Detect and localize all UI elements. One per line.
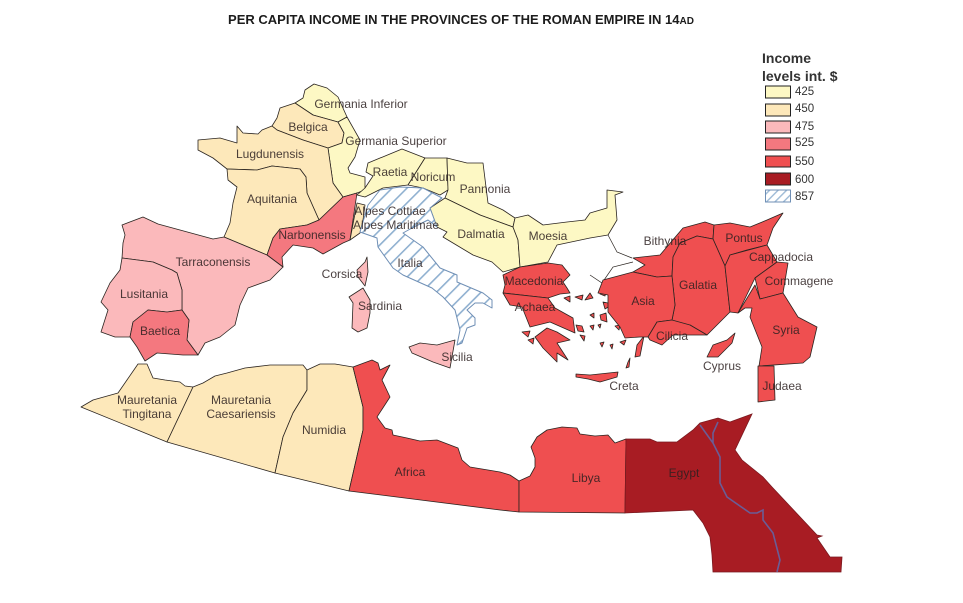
label: Egypt: Egypt — [669, 466, 700, 480]
province: Moesia — [513, 190, 623, 267]
province: Mauretania Tingitana — [81, 364, 193, 442]
legend item 475: 475 — [795, 121, 814, 133]
legend item 525: 525 — [795, 137, 814, 149]
label: Achaea: Achaea — [515, 300, 556, 314]
province: Egypt — [625, 414, 842, 572]
label: Libya: Libya — [572, 471, 601, 485]
province: Alpes — [350, 203, 365, 240]
province: Libya — [519, 427, 626, 513]
label: Mauretania Caesariensis: Mauretania — [211, 393, 271, 407]
label: Asia: Asia — [631, 294, 655, 308]
province: Creta — [576, 372, 618, 382]
label: Africa: Africa — [395, 465, 426, 479]
label: Pontus: Pontus — [725, 231, 763, 245]
label: Cyprus: Cyprus — [703, 359, 741, 373]
label: Macedonia: Macedonia — [505, 274, 564, 288]
province: Numidia — [275, 364, 363, 491]
province: Commagene — [755, 262, 788, 299]
label: Narbonensis: Narbonensis — [278, 228, 346, 242]
label: Italia: Italia — [397, 256, 423, 270]
label: Mauretania Tingitana: Tingitana — [123, 407, 172, 421]
province: Cilicia — [648, 320, 707, 345]
label: Sicilia: Sicilia — [441, 350, 473, 364]
label: Cilicia: Cilicia — [656, 329, 688, 343]
label: Corsica: Corsica — [322, 267, 363, 281]
legend item 450: 450 — [795, 103, 814, 115]
legend title: Income — [762, 50, 811, 66]
province: Cyprus — [707, 333, 735, 357]
legend item 600: 600 — [795, 174, 814, 186]
label: Numidia: Numidia — [302, 423, 346, 437]
label: Sardinia: Sardinia — [358, 299, 402, 313]
province: Belgica — [272, 103, 344, 148]
label: Raetia: Raetia — [373, 165, 408, 179]
label: Moesia: Moesia — [529, 229, 568, 243]
province: Raetia — [357, 149, 425, 197]
Thrace coast outline — [590, 235, 633, 283]
label: Mauretania Tingitana: Mauretania — [117, 393, 177, 407]
label: Syria: Syria — [772, 323, 800, 337]
province: Noricum — [408, 158, 448, 195]
legend item 600 — [766, 173, 814, 186]
legend item 857 — [766, 190, 814, 203]
label: Creta: Creta — [609, 379, 639, 393]
province: Baetica — [130, 310, 198, 361]
title: PER CAPITA INCOME IN THE PROVINCES OF THE ROMAN EMPIRE IN 14AD — [228, 12, 694, 27]
province: Macedonia — [503, 263, 570, 298]
province: Aquitania — [224, 166, 319, 255]
province: Achaea — [503, 293, 575, 333]
province: Bithynia — [633, 222, 714, 277]
province: Cappadocia — [725, 245, 777, 313]
legend item 550: 550 — [795, 156, 814, 168]
province: Germania Superior — [328, 117, 365, 197]
province: Lugdunensis — [198, 126, 343, 220]
legend item 857: 857 — [795, 191, 814, 203]
label: Lugdunensis: Lugdunensis — [236, 147, 304, 161]
legend item 425 — [766, 86, 814, 98]
Peloponnese — [535, 328, 570, 362]
legend item 425: 425 — [795, 86, 814, 98]
label: Galatia: Galatia — [679, 278, 717, 292]
legend item 550 — [766, 156, 814, 168]
province: Germania Inferior — [295, 84, 347, 122]
province: Judaea — [758, 366, 775, 402]
label: Judaea: Judaea — [762, 379, 802, 393]
province: Asia — [598, 272, 675, 338]
province: Pannonia — [445, 158, 515, 227]
province: Syria — [738, 285, 817, 366]
province: Italia — [360, 187, 492, 345]
province: Africa — [349, 360, 519, 512]
legend title: levels int. $ — [762, 68, 838, 84]
label: Germania Superior: Germania Superior — [345, 134, 447, 148]
province: Sicilia — [409, 340, 455, 368]
province labels — [117, 97, 834, 485]
province: Mauretania Caesariensis — [167, 365, 307, 473]
label: Bithynia: Bithynia — [644, 234, 687, 248]
map of Roman provinces — [81, 84, 842, 572]
label: Baetica: Baetica — [140, 324, 180, 338]
label: Tarraconensis: Tarraconensis — [176, 255, 250, 269]
label: Germania Inferior: Germania Inferior — [314, 97, 408, 111]
label: Belgica: Belgica — [288, 120, 328, 134]
label: Alpes Maritimae: Alpes Maritimae — [353, 218, 439, 232]
province: Dalmatia — [430, 198, 520, 272]
province: Corsica — [357, 257, 368, 286]
province: Tarraconensis — [122, 217, 283, 355]
label: Pannonia: Pannonia — [460, 182, 511, 196]
province: Sardinia — [349, 288, 370, 332]
label: Commagene: Commagene — [765, 274, 834, 288]
legend — [762, 50, 838, 203]
province: Galatia — [672, 236, 730, 335]
Aegean islands — [522, 292, 644, 368]
label: Alpes Cottiae: Alpes Cottiae — [354, 204, 426, 218]
label: Mauretania Caesariensis: Caesariensis — [206, 407, 276, 421]
legend item 525 — [766, 137, 814, 150]
river Nile — [700, 422, 780, 572]
province: Lusitania — [101, 258, 182, 337]
label: Noricum: Noricum — [411, 170, 455, 184]
legend item 450 — [766, 103, 814, 116]
province: Pontus — [713, 213, 783, 266]
legend item 475 — [766, 121, 814, 133]
label: Lusitania: Lusitania — [120, 287, 168, 301]
label: Dalmatia: Dalmatia — [457, 227, 505, 241]
province: Narbonensis — [267, 193, 357, 267]
label: Cappadocia: Cappadocia — [749, 250, 813, 264]
label: Aquitania: Aquitania — [247, 192, 297, 206]
